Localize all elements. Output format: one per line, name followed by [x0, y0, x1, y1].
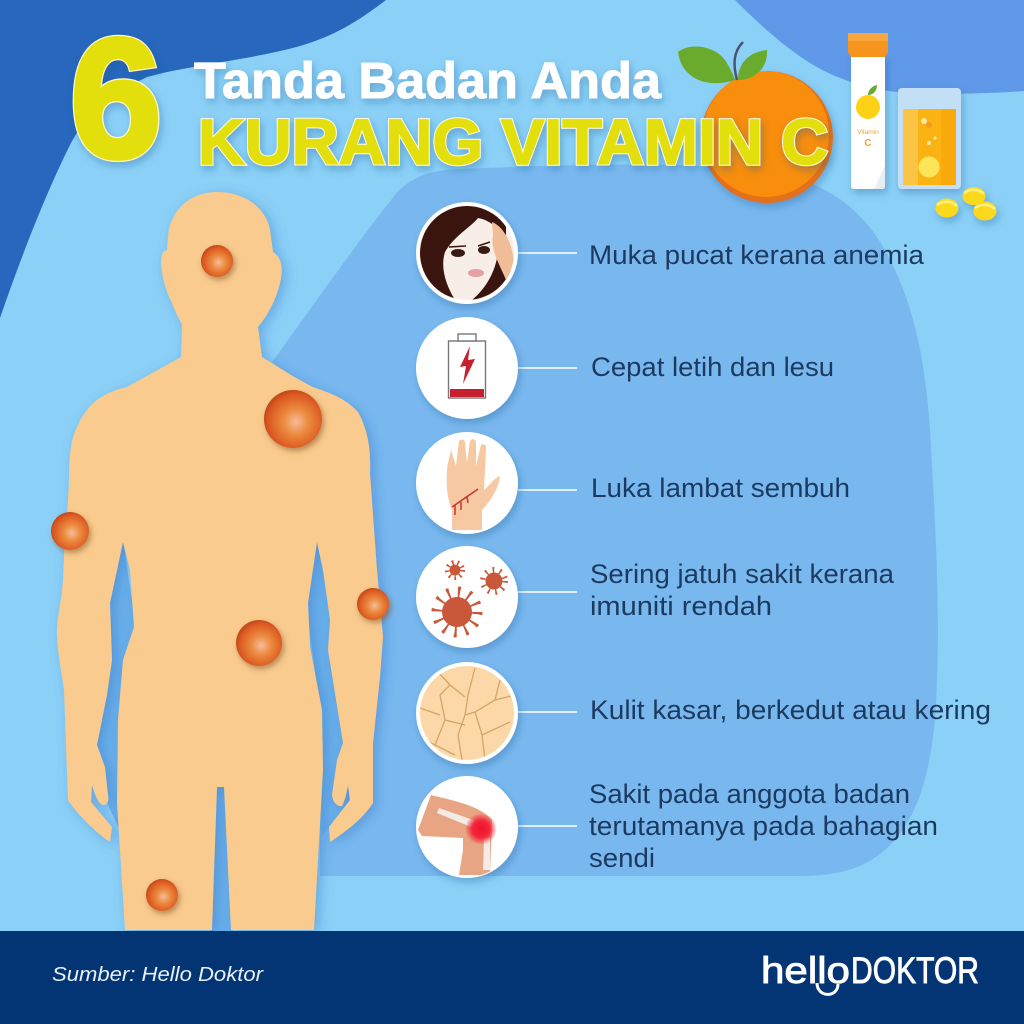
connector lines: [518, 253, 577, 826]
symptom list: terutamanya pada bahagian: [589, 811, 938, 841]
human body silhouette: [57, 192, 383, 932]
symptom list: Muka pucat kerana anemia: [589, 240, 924, 270]
icon: vitamin C tube: C: [864, 138, 872, 149]
symptom list: sendi: [589, 843, 655, 873]
logo: Hello Doktor: [761, 950, 979, 994]
icon: viruses: [416, 546, 518, 648]
icon: painful knee: [416, 776, 518, 878]
title: [194, 52, 828, 178]
title: KURANG VITAMIN C: [198, 106, 828, 178]
icon: vitamin C tube: [848, 33, 888, 189]
symptom list: Luka lambat sembuh: [591, 473, 850, 503]
logo: Hello Doktor: DOKTOR: [851, 950, 979, 991]
symptom list: Sakit pada anggota badan: [589, 779, 910, 809]
icon: pale face: [416, 202, 518, 304]
title: KURANG VITAMIN C: [198, 106, 828, 178]
icon: orange fruit: [678, 42, 833, 203]
symptom list: [589, 240, 991, 873]
title: Tanda Badan Anda: [194, 52, 662, 109]
icon: glass of orange drink: [898, 88, 961, 189]
symptom list: imuniti rendah: [590, 591, 772, 621]
icon: wounded hand: [416, 432, 518, 534]
icon: dry cracked skin: [416, 662, 518, 764]
number 6: 6: [70, 4, 162, 194]
source credit: Sumber: Hello Doktor: [52, 964, 264, 986]
logo: Hello Doktor: hello: [761, 950, 850, 991]
symptom list: Kulit kasar, berkedut atau kering: [590, 695, 991, 725]
footer bar: [0, 931, 1024, 1024]
icon: vitamin pills: [936, 187, 996, 220]
symptom list: Sering jatuh sakit kerana: [590, 559, 894, 589]
symptom list: Cepat letih dan lesu: [591, 352, 834, 382]
icon: low battery: [416, 317, 518, 419]
symptom spots on the body: [51, 245, 389, 911]
icon: vitamin C tube: Vitamin: [857, 129, 879, 136]
number 6: 6: [70, 4, 162, 194]
